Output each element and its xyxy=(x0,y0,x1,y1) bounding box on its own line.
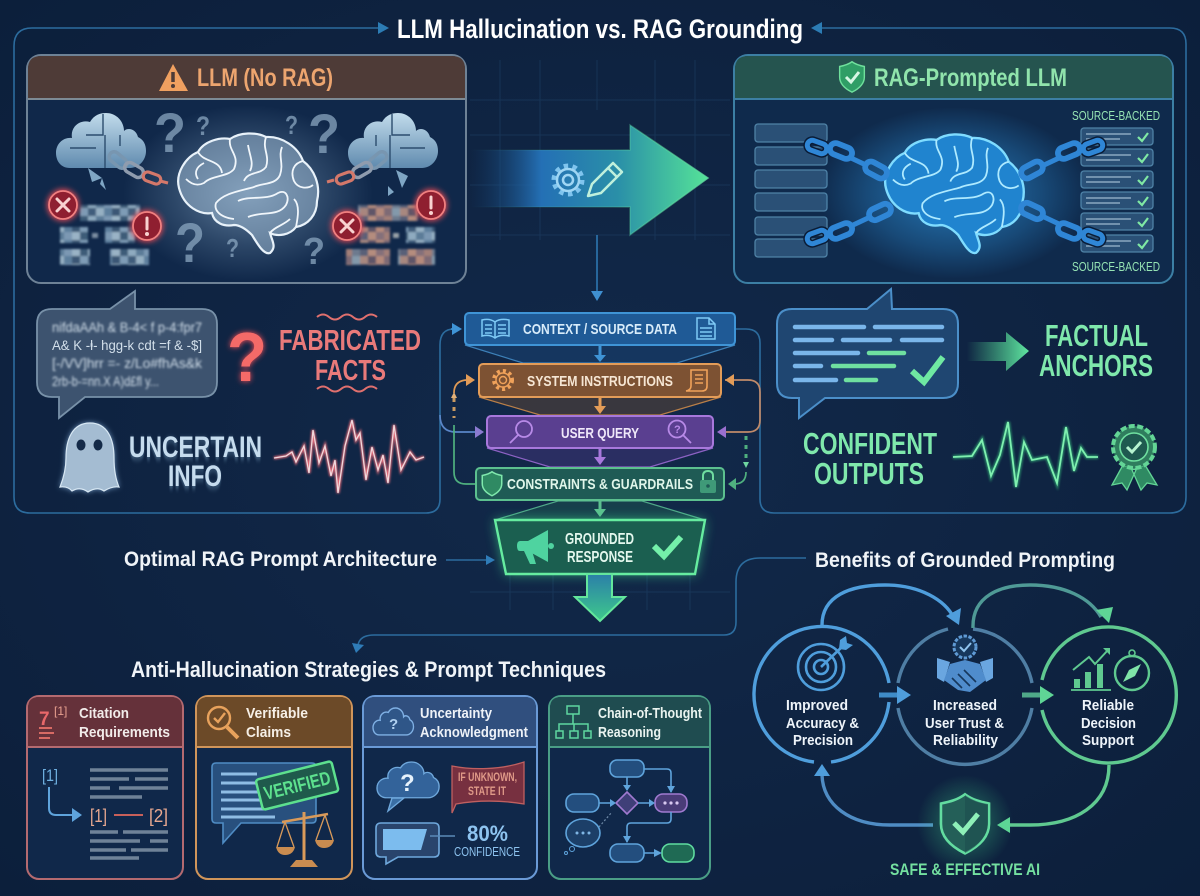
card: uncertainty acknowledgment: Uncertainty xyxy=(420,705,493,722)
label: uncertain info: UNCERTAIN xyxy=(129,431,262,464)
icon: cloud question xyxy=(373,708,414,735)
label: uncertain info xyxy=(129,431,262,495)
icon: question magnifier xyxy=(668,420,691,443)
icon: citation mark: 7 xyxy=(39,709,50,730)
icon: red question mark: ? xyxy=(227,318,267,396)
pixelated redacted text: left xyxy=(60,205,149,265)
title: LLM Hallucination vs. RAG Grounding xyxy=(397,14,803,44)
box: system instructions: SYSTEM INSTRUCTIONS xyxy=(527,373,673,390)
icon: handshake with badge xyxy=(937,636,993,692)
panel header: LLM no RAG: LLM (No RAG) xyxy=(197,64,333,92)
icon: citation mark: [1] xyxy=(54,704,67,718)
box: constraints xyxy=(476,468,724,500)
label: factual anchors xyxy=(1039,318,1153,383)
icon: gear small xyxy=(494,371,512,389)
citation diagram: [2] xyxy=(149,806,168,826)
pixelated redacted text: right xyxy=(346,205,435,265)
labels: source-backed: SOURCE-BACKED xyxy=(1072,108,1160,123)
confidence gauge xyxy=(376,821,520,864)
question marks: ? xyxy=(196,111,210,141)
question marks: ? xyxy=(303,231,325,273)
citation diagram xyxy=(42,766,168,858)
box: user query: USER QUERY xyxy=(561,425,639,442)
icon: scales xyxy=(276,812,334,867)
circle: improved accuracy xyxy=(754,626,889,762)
arrow: to factual anchors xyxy=(967,332,1029,371)
benefits cycle xyxy=(754,585,1176,879)
red flag note xyxy=(452,762,524,813)
question marks: ? xyxy=(175,211,205,274)
label: fabricated facts: FABRICATED xyxy=(279,325,421,357)
icon: document xyxy=(697,318,715,339)
panel header: LLM no RAG xyxy=(28,56,465,99)
label: confident outputs: CONFIDENT xyxy=(803,426,937,461)
icon: ghost xyxy=(60,423,119,492)
circle: reliable decision: Decision xyxy=(1081,715,1136,732)
circle: improved accuracy: Improved xyxy=(786,697,848,714)
verified stamp: VERIFIED xyxy=(262,768,333,805)
side feedback connectors xyxy=(440,329,760,484)
question marks: ? xyxy=(285,110,298,140)
icon: safety shield xyxy=(917,775,1013,871)
icon: citation mark xyxy=(39,704,67,738)
icon: scroll xyxy=(686,370,707,391)
speech bubble: garbled output: nifdaAAh & B-4< f p-4:fpr7 xyxy=(52,319,202,335)
panel: RAG-prompted LLM xyxy=(734,55,1173,283)
icon: megaphone xyxy=(517,530,554,564)
arrow: safety to accuracy xyxy=(814,764,933,825)
question marks xyxy=(154,101,340,274)
card: verifiable claims: Claims xyxy=(246,724,291,741)
icon: cloud question: ? xyxy=(389,716,398,733)
circle: improved accuracy: Accuracy & xyxy=(786,715,859,732)
card: chain-of-thought xyxy=(549,696,710,879)
funnels xyxy=(465,345,735,520)
icon: gear xyxy=(554,166,582,194)
icon: magnifier check xyxy=(208,707,238,738)
circle: reliable decision: Support xyxy=(1082,732,1134,749)
confidence gauge: CONFIDENCE xyxy=(454,844,520,859)
circle: increased trust: Increased xyxy=(933,697,997,714)
box: user query xyxy=(487,416,713,448)
speech bubble: grounded output xyxy=(777,289,958,418)
circle: increased trust: Reliability xyxy=(933,732,999,749)
icon: target xyxy=(798,636,853,690)
flow arrows between boxes xyxy=(594,345,606,517)
document stack: left xyxy=(755,124,827,257)
flow chart xyxy=(564,760,694,862)
box: constraints: CONSTRAINTS & GUARDRAILS xyxy=(507,476,693,493)
label: fabricated facts: FACTS xyxy=(315,355,386,387)
heading: architecture: Optimal RAG Prompt Architecture xyxy=(124,548,437,571)
arrow: trust to decision (middle) xyxy=(1022,686,1054,704)
box: context xyxy=(465,313,735,345)
speech bubble: garbled output: A& K -ⱡ- hgg-k cdt =f & -$] xyxy=(52,337,202,353)
speech bubble: garbled output: [-/VV]hrr =- z/Lo#fhAs&k xyxy=(52,355,203,371)
alert icons xyxy=(47,189,447,242)
box: context: CONTEXT / SOURCE DATA xyxy=(523,321,677,338)
icon: magnifier xyxy=(510,421,532,443)
circle: reliable decision xyxy=(1042,627,1176,763)
card: uncertainty acknowledgment xyxy=(363,696,537,879)
side arrowheads xyxy=(451,323,749,490)
icon: question magnifier: ? xyxy=(674,424,681,436)
label: factual anchors: ANCHORS xyxy=(1039,348,1153,383)
verified source stack: right xyxy=(1081,128,1153,252)
red flag note: IF UNKNOWN, xyxy=(458,772,517,784)
arrow: decision to safety xyxy=(997,765,1109,833)
architecture stack xyxy=(451,313,749,621)
icon: pencil xyxy=(588,163,622,196)
labels: source-backed: SOURCE-BACKED xyxy=(1072,259,1160,274)
card: citation requirements xyxy=(27,696,183,879)
card: chain-of-thought: Reasoning xyxy=(598,724,661,741)
panel header: RAG-prompted LLM: RAG-Prompted LLM xyxy=(874,64,1067,92)
icon: lock xyxy=(700,471,716,493)
label: fabricated facts xyxy=(279,314,421,392)
label: safe and effective: SAFE & EFFECTIVE AI xyxy=(890,860,1040,879)
waveform: noisy xyxy=(274,420,424,493)
card: citation requirements: Citation xyxy=(79,705,129,722)
icon: right puzzle cloud with broken chain xyxy=(327,113,438,196)
speech bubble: garbled output: 2rb-b-=nn.X A)d£fl y... xyxy=(52,373,159,389)
labels: source-backed xyxy=(1072,108,1160,274)
brain: hazy xyxy=(123,105,373,281)
circle: improved accuracy: Precision xyxy=(793,732,853,749)
confidence gauge: 80% xyxy=(467,821,508,846)
frame: outer connector lines xyxy=(14,28,1186,513)
connector: benefits to strategies xyxy=(352,558,806,653)
card: chain-of-thought: Chain-of-Thought xyxy=(598,705,702,722)
question marks: ? xyxy=(308,102,340,165)
icon: red question mark: ? xyxy=(227,318,267,396)
question marks: ? xyxy=(154,101,186,164)
box: grounded response: RESPONSE xyxy=(567,549,633,566)
card: uncertainty acknowledgment: Acknowledgment xyxy=(420,724,528,741)
red flag note: STATE IT xyxy=(468,786,506,798)
big transition arrow xyxy=(470,125,708,235)
box: system instructions xyxy=(479,364,721,397)
box: grounded response xyxy=(495,520,705,574)
claim bubble xyxy=(212,763,316,843)
icon: book xyxy=(482,319,509,338)
label: uncertain info: INFO xyxy=(168,462,222,495)
card: verifiable claims xyxy=(196,696,352,879)
heading: strategies: Anti-Hallucination Strategies & Prompt Techniques xyxy=(131,657,606,682)
panel header: RAG-prompted LLM xyxy=(735,56,1172,99)
question marks: ? xyxy=(226,233,239,263)
waveform: steady xyxy=(953,422,1098,487)
citation diagram: [1] xyxy=(42,766,58,785)
label: factual anchors: FACTUAL xyxy=(1045,318,1148,353)
label: uncertain info: INFO xyxy=(168,460,222,493)
icon: chart and compass xyxy=(1071,648,1149,690)
label: confident outputs xyxy=(803,426,937,491)
card: verifiable claims: Verifiable xyxy=(246,705,308,722)
verified stamp xyxy=(256,761,339,810)
circle: reliable decision: Reliable xyxy=(1082,697,1134,714)
box: grounded response: GROUNDED xyxy=(565,531,634,548)
chains xyxy=(806,139,1104,245)
icon: award badge xyxy=(1112,426,1157,490)
arrow: trust to decision (top) xyxy=(973,585,1113,628)
brain: grounded xyxy=(819,107,1089,279)
label: confident outputs: OUTPUTS xyxy=(814,456,924,491)
connector: to context box xyxy=(591,235,603,301)
circle: increased trust: User Trust & xyxy=(925,715,1004,732)
citation diagram: [1] xyxy=(90,806,107,826)
heading: benefits: Benefits of Grounded Prompting xyxy=(815,549,1115,572)
arrow: output xyxy=(575,574,625,621)
label: uncertain info: UNCERTAIN xyxy=(129,433,262,466)
icon: shield small xyxy=(482,472,502,496)
card: citation requirements: Requirements xyxy=(79,724,170,741)
arrow: accuracy to trust (top) xyxy=(822,585,961,625)
speech bubble: garbled output xyxy=(37,291,217,418)
icon: hierarchy xyxy=(556,706,591,738)
cloud with question: ? xyxy=(400,770,415,797)
icon: left puzzle cloud with broken chain xyxy=(56,113,168,190)
arrow: accuracy to trust (middle) xyxy=(879,686,911,704)
circle: increased trust xyxy=(898,629,1032,764)
cloud with question xyxy=(377,762,439,811)
panel: LLM no RAG xyxy=(27,55,466,283)
